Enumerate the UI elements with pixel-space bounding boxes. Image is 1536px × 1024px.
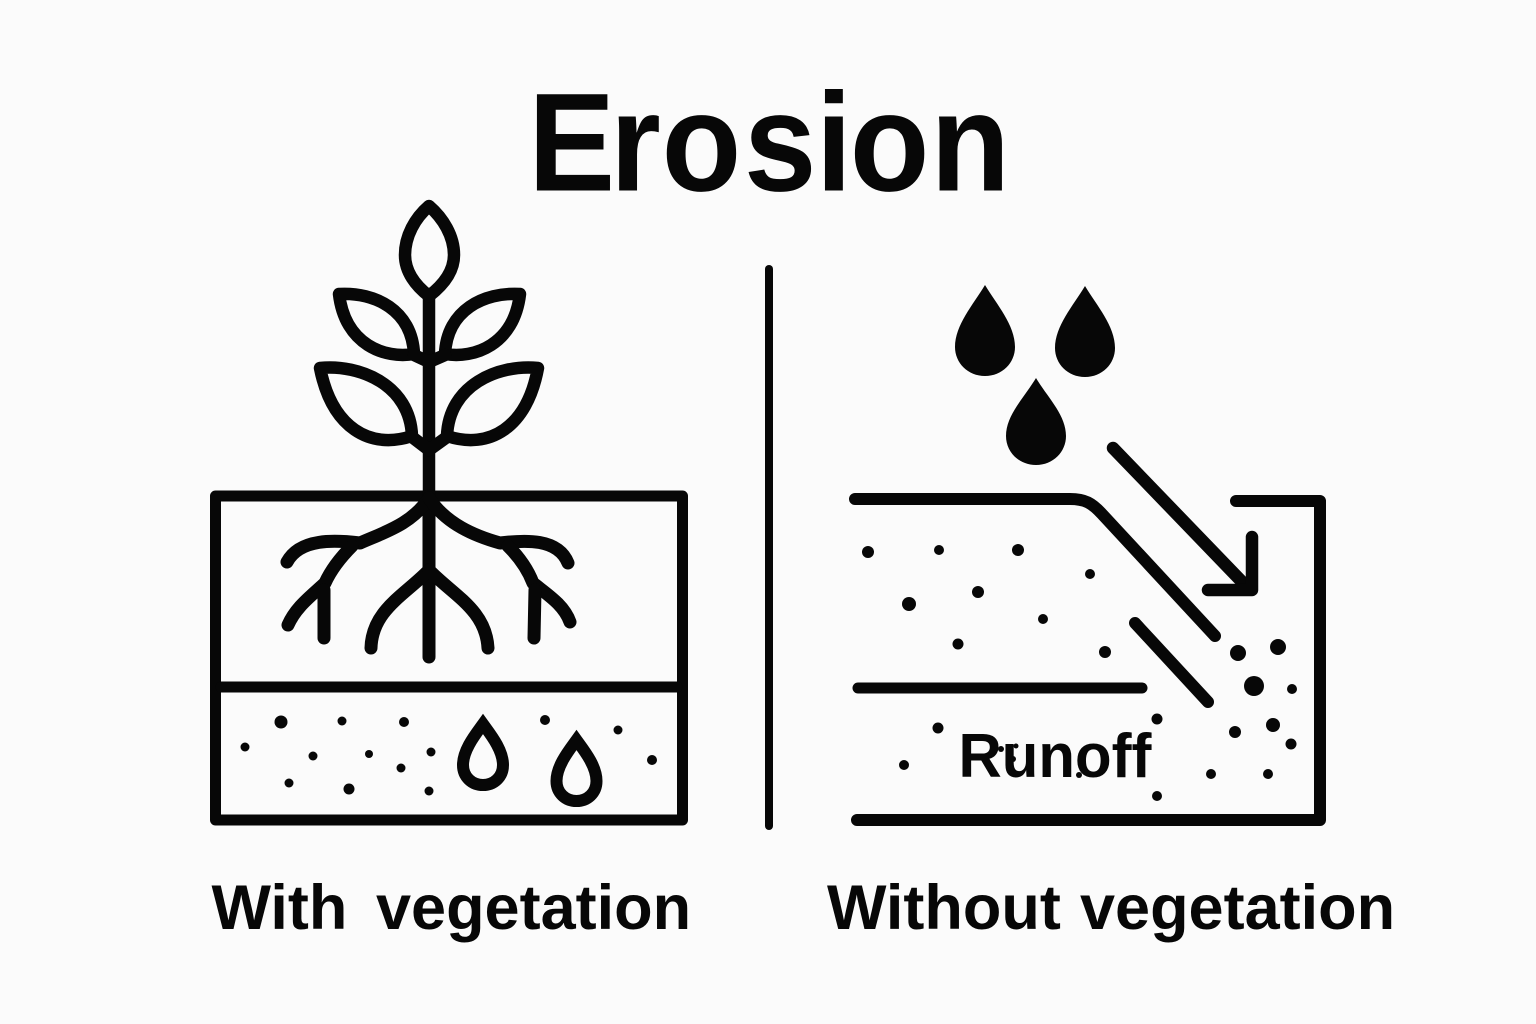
icon: roots	[287, 496, 570, 657]
label: runoff: Runoff	[958, 722, 1152, 791]
panel: with vegetation	[216, 206, 682, 820]
icon: soil box	[216, 496, 682, 820]
icon: soil particles right	[862, 544, 1297, 801]
icon: slope surface and box	[855, 499, 1320, 820]
label: with vegetation: vegetation	[376, 873, 691, 943]
label: without vegetation: Without	[827, 873, 1061, 943]
title: Erosion	[528, 64, 1010, 221]
icon: plant stem and leaves	[320, 206, 538, 496]
label: with vegetation: With	[212, 873, 347, 943]
label: without vegetation: vegetation	[1080, 873, 1395, 943]
icon: rain drops	[955, 285, 1115, 465]
icon: water drops in soil	[463, 724, 596, 801]
panel: without vegetation	[855, 448, 1320, 820]
divider	[765, 269, 773, 826]
arrow: runoff direction	[1113, 448, 1252, 590]
icon: soil particles left	[240, 715, 657, 796]
